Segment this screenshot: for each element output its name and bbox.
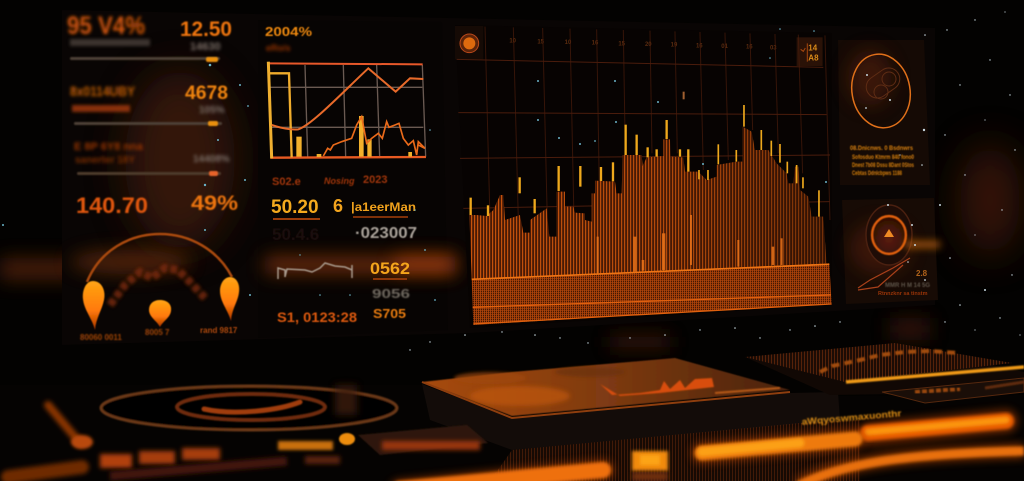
- metric: 140.70: 140.70: [76, 193, 148, 218]
- metric row 3: 14408%: [193, 154, 230, 165]
- metric row 2: [70, 83, 228, 126]
- readout 023007: [272, 225, 417, 244]
- blurred desk controls: [8, 405, 488, 477]
- metric row 2: 8x0114UBY: [70, 83, 136, 99]
- chart header: 03: [770, 45, 777, 51]
- caption: [850, 145, 915, 177]
- line and bar chart: [268, 62, 426, 158]
- footer readouts: [277, 306, 406, 325]
- floor grid: [472, 263, 832, 325]
- monitor frame: [62, 10, 935, 345]
- icon: right drop: [220, 277, 239, 321]
- labels: [878, 269, 930, 297]
- readout 50.20: 6: [333, 196, 343, 216]
- gauge labels: [80, 326, 238, 342]
- labels: 2.8: [916, 269, 928, 278]
- metric: 49%: 49%: [191, 192, 238, 215]
- chart header: 20: [645, 42, 652, 48]
- heading: eRo/s: [266, 43, 291, 53]
- date line: Nosing: [324, 176, 355, 186]
- chart header: 15: [618, 41, 626, 47]
- readouts right: 0562: [370, 259, 410, 278]
- panel: main bar chart: [455, 26, 832, 325]
- sparkline: [278, 263, 352, 279]
- mini spectrum: [600, 378, 714, 396]
- chart header: 16: [696, 43, 703, 49]
- readout 50.20: [271, 196, 416, 220]
- gauge labels: 8005 7: [145, 328, 170, 337]
- bars silhouette: [469, 127, 827, 279]
- label strip: aWqyoswmaxuonthr: [801, 408, 902, 427]
- metric row 3: sanerter 18Y: [75, 155, 135, 166]
- icon: left drop: [83, 281, 105, 330]
- chart header: 10: [565, 40, 572, 46]
- chart header: A8: [808, 54, 819, 63]
- gauge: [80, 234, 239, 342]
- date line: S02.e: [272, 176, 301, 188]
- highlight bars: [597, 215, 783, 273]
- panel: right lower radar: [842, 198, 940, 304]
- readout 50.20: |a1eerMan: [351, 200, 416, 214]
- yellow spikes: [471, 92, 819, 217]
- gauge labels: 80060 0011: [80, 333, 122, 342]
- readouts right: [370, 259, 410, 301]
- metric row 1: 14630: [190, 41, 221, 53]
- metric row 1: 12.50: [180, 18, 232, 41]
- panel: small chart and readouts: [265, 24, 426, 325]
- center tablet: [422, 358, 790, 418]
- glowing lights: [400, 420, 1024, 481]
- labels: MMR H M 14 5G: [885, 283, 930, 289]
- readout 023007: ·023007: [355, 225, 417, 242]
- heading: [265, 24, 313, 53]
- caption: Sofosduo Ktmrm 840 fono0: [852, 155, 915, 161]
- stars: [2, 11, 1021, 351]
- chart header: 16: [746, 45, 753, 51]
- readout 023007: 50.4.6: [272, 225, 319, 244]
- caption: 08.Dnicnws. 0 Bsdnwrs: [850, 145, 913, 152]
- metric row 3: E 8P 6Y8 nna: [74, 141, 144, 153]
- caption: Cebtas Ddnlcbpws 1188: [852, 171, 902, 177]
- panel: right circular diagram: [838, 40, 930, 185]
- readouts right: 9056: [372, 286, 410, 301]
- metric row 1: [67, 12, 232, 62]
- metric row 2: 105%: [199, 105, 225, 116]
- gauge labels: rand 9817: [200, 326, 238, 335]
- grid lines: [457, 27, 830, 220]
- footer readouts: S705: [373, 306, 406, 321]
- chart header: 15: [537, 39, 545, 45]
- chart header: [455, 26, 823, 66]
- icon: triangle: [884, 229, 894, 237]
- date line: [272, 174, 387, 188]
- control desk: [0, 343, 1024, 481]
- panel: KPI list left: [67, 12, 238, 218]
- chart header: 19: [671, 43, 678, 49]
- caption: Dnest 7b08 Dssu 8Dant 0Stos: [852, 163, 914, 169]
- chart header: 16: [592, 41, 599, 47]
- metric row 3: [74, 141, 230, 176]
- readout 50.20: 50.20: [271, 197, 319, 218]
- right tablet: [745, 343, 1024, 403]
- heading: 2004%: [265, 24, 313, 39]
- chart header: 14: [808, 44, 818, 53]
- metric row 1: 95 V4%: [67, 12, 145, 40]
- chart header: 01: [721, 44, 729, 50]
- metric row 2: 4678: [185, 83, 228, 104]
- chart header: 10: [509, 39, 517, 45]
- labels: Rtnnzknr sa tinstm: [878, 291, 928, 297]
- date line: 2023: [363, 174, 387, 186]
- icon: centre drop: [149, 300, 171, 327]
- concentric dial: [101, 385, 397, 430]
- footer readouts: S1, 0123:28: [277, 309, 357, 325]
